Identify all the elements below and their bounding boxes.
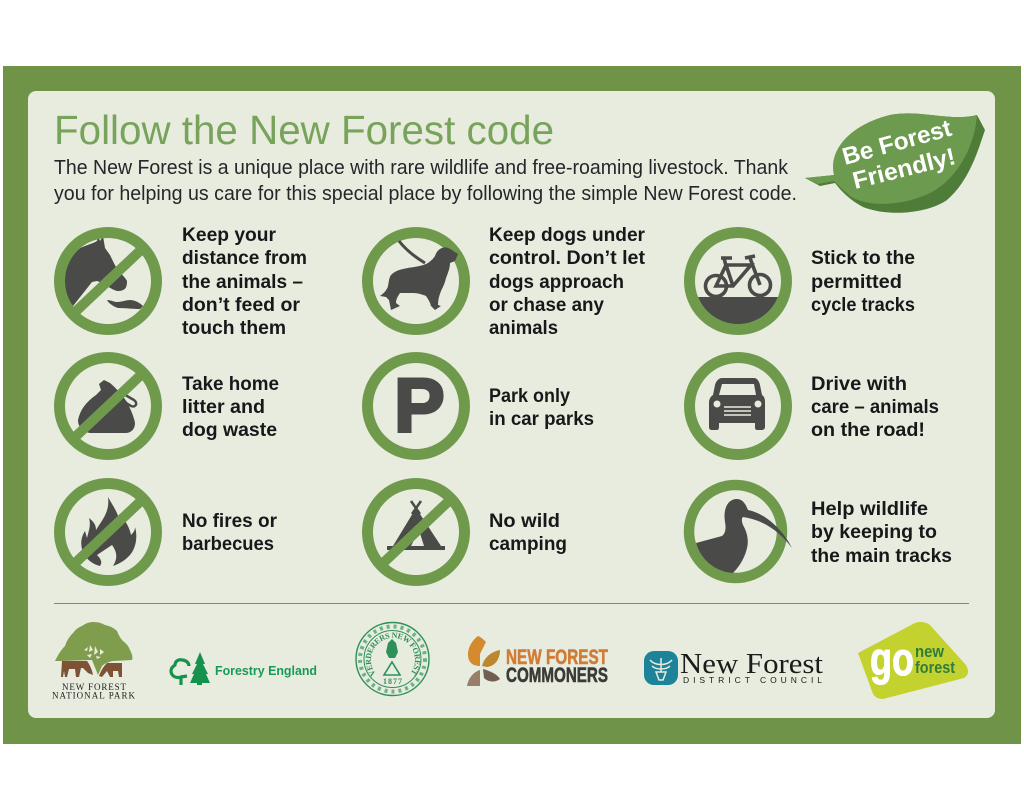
icon: tent, prohibited [368,484,464,580]
inner panel [28,91,995,718]
text: keep dogs under control: animals [489,318,558,339]
text: take home litter [182,374,279,441]
logo: Forestry England [171,652,317,685]
text: help wildlife: Help wildlife [811,499,928,520]
icon: dog on lead [368,232,464,330]
text: help wildlife [811,499,952,567]
text: keep dogs under control: dogs approach [489,272,624,293]
text: no wild camping: camping [489,534,567,555]
text: keep dogs under control: or chase any [489,295,604,316]
logo: New Forest National Park: NEW FOREST [62,682,126,692]
intro text: The New Forest is a unique place with rare wildlife and free-roaming livestock. Thank [54,157,789,179]
text: drive with care: care – animals [811,397,939,418]
badge: Be Forest Friendly leaf [805,113,985,213]
logo: Verderers of the New Forest seal: VERDERERS NEW FOREST [366,632,420,677]
text: no fires or barbecues: No fires or [182,511,278,532]
text: no fires or barbecues [182,511,278,555]
logo: New Forest District Council: DISTRICT COUNCIL [683,675,822,685]
text: no fires or barbecues: barbecues [182,534,274,555]
text: stick to cycle tracks [811,248,915,316]
text: keep your distance [182,225,307,339]
icon: flames, prohibited [60,484,156,580]
icon: bicycle on track [690,232,786,330]
logo: New Forest District Council: New Forest [680,648,823,680]
text: keep dogs under control [489,225,646,339]
logo: New Forest Commoners: COMMONERS [506,664,608,687]
intro text: you for helping us care for this special place by following the simple New Forest code. [54,183,797,205]
logo: New Forest District Council [644,648,823,685]
badge: Be Forest Friendly leaf: Be Forest [839,115,955,171]
text: keep dogs under control: Keep dogs under [489,225,646,246]
text: park only in car parks: in car parks [489,409,594,430]
text: park only in car parks [489,386,594,430]
logo: Go New Forest: forest [915,658,955,677]
logo: New Forest National Park [52,622,136,700]
icon: horse and hand, no feeding [60,232,156,330]
logo: Go New Forest: go [870,633,914,685]
icon: curlew bird [689,485,792,578]
text: keep your distance: distance from [182,248,307,269]
text: keep your distance: touch them [182,318,286,339]
text: stick to cycle tracks: permitted [811,272,902,293]
text: keep your distance: Keep your [182,225,277,246]
icon: car front [690,358,786,454]
text: help wildlife: the main tracks [811,546,952,567]
text: drive with care: on the road! [811,420,925,441]
text: take home litter: dog waste [182,420,277,441]
text: stick to cycle tracks: cycle tracks [811,295,915,316]
intro text [54,157,797,205]
text: take home litter: litter and [182,397,265,418]
text: no wild camping [489,511,567,555]
logo: Go New Forest: new [915,642,945,661]
text: drive with care [811,374,939,441]
text: keep dogs under control: control. Don’t let [489,248,646,269]
text: keep your distance: don’t feed or [182,295,301,316]
text: take home litter: Take home [182,374,279,395]
icon: parking P: P [394,364,445,448]
logo: New Forest Commoners [467,636,608,687]
text: no wild camping: No wild [489,511,560,532]
title: Follow the New Forest code [54,107,554,153]
text: help wildlife: by keeping to [811,522,937,543]
badge: Be Forest Friendly leaf: Friendly! [850,143,958,195]
icon: parking P [368,358,464,454]
logo: Verderers of the New Forest seal [355,622,430,696]
logo: New Forest National Park: NATIONAL PARK [52,690,136,700]
icon: litter bag, prohibited [60,358,156,454]
logo: Verderers of the New Forest seal: 1877 [383,677,402,686]
text: stick to cycle tracks: Stick to the [811,248,915,269]
text: park only in car parks: Park only [489,386,570,407]
logo: Go New Forest [858,622,968,699]
logo: New Forest Commoners: NEW FOREST [506,646,608,669]
text: drive with care: Drive with [811,374,907,395]
text: keep your distance: the animals – [182,272,303,293]
logo: Forestry England: Forestry England [215,663,317,678]
